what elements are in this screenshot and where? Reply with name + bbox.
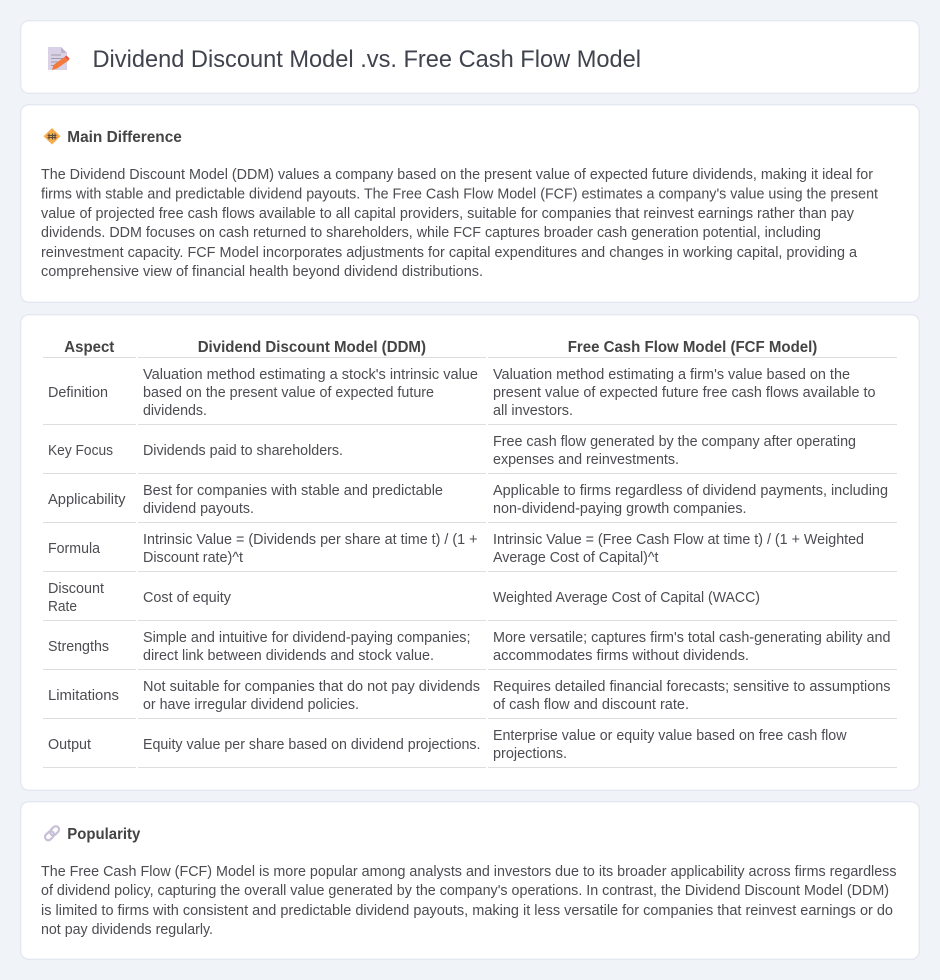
table row: key focus: expenses and reinvestments. bbox=[493, 452, 679, 468]
table header row: Dividend Discount Model (DDM) bbox=[198, 339, 426, 356]
heading: popularity: Popularity bbox=[67, 826, 140, 843]
table row: discount rate: Discount bbox=[48, 581, 104, 597]
table row: limitations bbox=[43, 679, 897, 719]
panel: comparison table bbox=[21, 315, 919, 790]
table row: definition: Valuation method estimating a stock's intrinsic value bbox=[143, 367, 478, 383]
table row: key focus bbox=[43, 434, 897, 474]
table row: discount rate: Rate bbox=[48, 599, 77, 615]
table row: applicability bbox=[43, 483, 897, 523]
panel: title header bbox=[21, 21, 919, 93]
text block: main difference paragraph: value of projected free cash flows available to all capital providers, suitable for companies that reinvest earnings rather than pay bbox=[41, 206, 855, 222]
table row: strengths: Strengths bbox=[48, 639, 109, 655]
table row: strengths bbox=[43, 630, 897, 670]
table row: formula: Average Cost of Capital)^t bbox=[493, 550, 658, 566]
table row: formula: Discount rate)^t bbox=[143, 550, 243, 566]
table row: strengths: More versatile; captures firm's total cash-generating ability and bbox=[493, 630, 890, 646]
text block: main difference paragraph: dividends. DDM focuses on cash returned to shareholders, while FCF captures broader cash generation potential, including bbox=[41, 225, 821, 241]
table row: formula bbox=[43, 532, 897, 572]
table row: applicability: Applicability bbox=[48, 492, 126, 508]
panel: popularity bbox=[21, 802, 919, 959]
table row: limitations: or have irregular dividend policies. bbox=[143, 697, 359, 713]
table row: limitations: Requires detailed financial forecasts; sensitive to assumptions bbox=[493, 679, 890, 695]
table row: discount rate: Cost of equity bbox=[143, 590, 232, 606]
table header row: Aspect bbox=[64, 339, 115, 356]
title: Dividend Discount Model .vs. Free Cash Flow Model bbox=[92, 46, 641, 73]
table row: applicability: dividend payouts. bbox=[143, 501, 254, 517]
table row: output: Enterprise value or equity value based on free cash flow bbox=[493, 728, 847, 744]
text block: main difference paragraph: The Dividend Discount Model (DDM) values a company based on the present value of expected future dividends, making it ideal for bbox=[41, 167, 873, 183]
table row: applicability: Applicable to firms regardless of dividend payments, including bbox=[493, 483, 888, 499]
text block: main difference paragraph: reinvestment capacity. FCF Model incorporates adjustments for capital expenditures and changes in working capital, providing a bbox=[41, 245, 858, 261]
table header row: Free Cash Flow Model (FCF Model) bbox=[568, 339, 817, 356]
table header row bbox=[43, 339, 897, 358]
table row: applicability: Best for companies with stable and predictable bbox=[143, 483, 443, 499]
table row: definition bbox=[43, 367, 897, 425]
text block: main difference paragraph bbox=[41, 167, 878, 280]
text block: main difference paragraph: firms with stable and predictable dividend payouts. The Free Cash Flow Model (FCF) estimates a company's value using the present bbox=[41, 186, 878, 202]
icon: orange diamond bbox=[44, 128, 60, 144]
table row: definition: present value of expected future free cash flows available to bbox=[493, 385, 876, 401]
text block: main difference paragraph: comprehensive view of financial health beyond dividend distributions. bbox=[41, 264, 483, 280]
table row: output bbox=[43, 728, 897, 768]
text block: popularity paragraph: of dividend policy, capturing the overall value generated by the company's operations. In contrast, the Dividend Discount Model (DDM) bbox=[41, 883, 889, 899]
table row: output: projections. bbox=[493, 746, 567, 762]
text block: popularity paragraph: The Free Cash Flow (FCF) Model is more popular among analysts and investors due to its broader applicability across firms regardless bbox=[41, 864, 896, 880]
table row: definition: dividends. bbox=[143, 403, 207, 419]
table row: applicability: non-dividend-paying growth companies. bbox=[493, 501, 746, 517]
table row: definition: all investors. bbox=[493, 403, 573, 419]
table row: formula: Intrinsic Value = (Free Cash Flow at time t) / (1 + Weighted bbox=[493, 532, 864, 548]
table row: limitations: Not suitable for companies that do not pay dividends bbox=[143, 679, 480, 695]
table row: definition: based on the present value of expected future bbox=[143, 385, 434, 401]
table row: limitations: of cash flow and discount rate. bbox=[493, 697, 689, 713]
icon: memo with pencil bbox=[48, 47, 70, 70]
text block: popularity paragraph: is limited to firms with consistent and predictable dividend payouts, making it less versatile for companies that reinvest earnings or do bbox=[41, 903, 893, 919]
table row: definition: Valuation method estimating a firm's value based on the bbox=[493, 367, 850, 383]
table row: key focus: Key Focus bbox=[48, 443, 113, 459]
panel: main difference bbox=[21, 105, 919, 302]
table row: definition: Definition bbox=[48, 385, 108, 401]
table row: key focus: Dividends paid to shareholders. bbox=[143, 443, 343, 459]
table row: discount rate bbox=[43, 581, 897, 621]
heading: main difference: Main Difference bbox=[67, 129, 182, 146]
text block: popularity paragraph: not pay dividends regularly. bbox=[41, 922, 213, 938]
table row: strengths: Simple and intuitive for dividend-paying companies; bbox=[143, 630, 470, 646]
table row: output: Equity value per share based on dividend projections. bbox=[143, 737, 480, 753]
table row: discount rate: Weighted Average Cost of Capital (WACC) bbox=[493, 590, 760, 606]
table row: strengths: accommodates firms without dividends. bbox=[493, 648, 749, 664]
icon: chain link bbox=[44, 825, 60, 842]
table row: key focus: Free cash flow generated by the company after operating bbox=[493, 434, 856, 450]
table row: formula: Intrinsic Value = (Dividends per share at time t) / (1 + bbox=[143, 532, 478, 548]
table row: limitations: Limitations bbox=[48, 688, 119, 704]
text block: popularity paragraph bbox=[41, 864, 896, 938]
table row: strengths: direct link between dividends and stock value. bbox=[143, 648, 434, 664]
table row: output: Output bbox=[48, 737, 91, 753]
table row: formula: Formula bbox=[48, 541, 100, 557]
